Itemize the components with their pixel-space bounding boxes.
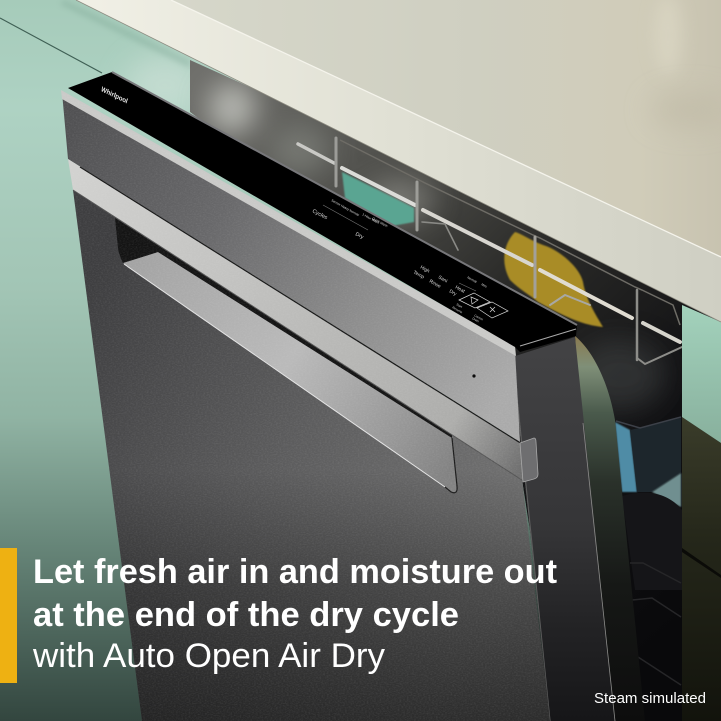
steam — [208, 82, 666, 411]
panel labels: Cycles — [311, 208, 328, 221]
brushed steel texture — [60, 90, 560, 721]
panel labels: Heat — [454, 285, 466, 295]
panel labels: Rinse — [428, 279, 442, 290]
dishwasher interior — [190, 60, 721, 721]
start button — [459, 293, 490, 308]
panel labels: Dry — [354, 231, 365, 241]
lower rack wires — [630, 563, 681, 685]
panel labels: High — [419, 265, 431, 275]
headline: with Auto Open Air Dry — [32, 637, 386, 675]
dish rack rails — [298, 138, 682, 364]
upper rack wire — [340, 140, 680, 325]
footnote: Steam simulated — [594, 690, 706, 707]
panel labels: Drain — [472, 316, 480, 324]
panel labels: 1-Hour Wash — [362, 212, 380, 225]
door side panel — [512, 337, 615, 721]
panel labels: Mini — [481, 282, 488, 289]
handle recess — [115, 218, 457, 493]
headline: at the end of the dry cycle — [33, 596, 459, 634]
headline — [32, 553, 557, 675]
door lower front — [73, 190, 550, 721]
panel labels: Temp — [412, 270, 425, 281]
cancel button — [477, 302, 508, 318]
panel labels: Cancel — [474, 313, 484, 322]
panel labels — [311, 198, 488, 324]
lower rack glassware — [615, 422, 637, 492]
steel control face — [61, 90, 520, 442]
panel labels: Sani — [437, 275, 448, 284]
indicator hole — [472, 374, 476, 378]
panel labels: Start — [456, 302, 463, 309]
handle end cap — [520, 438, 538, 482]
teal dish — [342, 172, 414, 226]
right wall panel — [682, 305, 721, 721]
panel labels: Normal — [467, 275, 478, 284]
black control panel — [68, 72, 577, 352]
panel labels: Sensor Heavy Normal — [331, 198, 360, 217]
handle strip — [68, 159, 525, 482]
panel labels: Resume — [452, 305, 464, 314]
panel labels: Dry — [448, 289, 458, 298]
accent bar — [0, 548, 17, 683]
headline: Let fresh air in and moisture out — [33, 553, 557, 591]
yellow dish — [504, 232, 603, 327]
curved inner door liner — [575, 336, 645, 721]
panel labels: Quick Wash — [372, 216, 389, 228]
logo: Whirlpool: Whirlpool — [101, 86, 129, 106]
countertop — [76, 0, 721, 322]
